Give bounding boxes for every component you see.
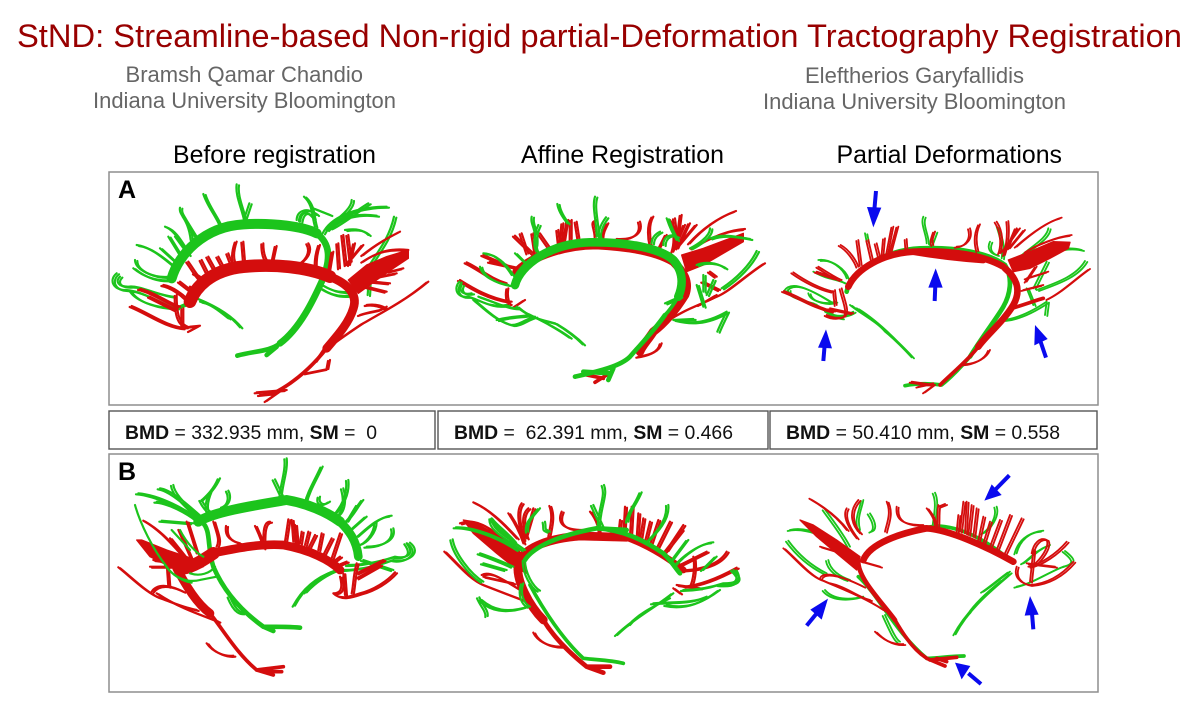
stat box: affine registration [438,411,768,449]
tract: panel B partial deformations [783,493,1075,666]
author: Eleftherios Garyfallidis: Indiana University Bloomington [763,89,1066,114]
tract: panel B before registration [118,458,415,675]
author: Bramsh Qamar Chandio: Bramsh Qamar Chandio [126,62,363,87]
stat box: partial deformations [770,411,1097,449]
blue arrow: panel B right [1025,596,1039,629]
title: StND: Streamline-based Non-rigid partial-Deformation Tractography Registration [17,17,1182,54]
column heading: partial deformations: Partial Deformations [836,142,1062,169]
blue arrow: panel A lower left [818,329,832,361]
column heading: affine registration: Affine Registration [521,142,724,169]
blue arrow: panel A top left [867,191,881,227]
panel A frame [109,172,1098,405]
blue arrow: panel B top right [984,475,1009,501]
panel B frame [109,454,1098,692]
author: Eleftherios Garyfallidis: Eleftherios Garyfallidis [805,63,1024,88]
tract: panel B affine registration [444,485,740,673]
panel B label: B [118,458,136,486]
author: Bramsh Qamar Chandio: Indiana University Bloomington [93,88,396,113]
stat box: before registration: BMD = 332.935 mm, SM = 0 [125,422,377,444]
column heading: before registration: Before registration [173,142,376,169]
tract: panel A affine registration [456,197,765,382]
panel A label: A [118,176,136,204]
blue arrow: panel A centre [928,268,943,301]
stat box: partial deformations: BMD = 50.410 mm, SM = 0.558 [786,422,1060,444]
author: Bramsh Qamar Chandio [93,62,396,113]
blue arrow: panel A lower right [1034,325,1048,358]
tract: panel A before registration [113,184,428,402]
author: Eleftherios Garyfallidis [763,63,1066,114]
stat box: before registration [109,411,435,449]
blue arrow: panel B left [807,599,828,626]
stat box: affine registration: BMD = 62.391 mm, SM = 0.466 [454,422,733,444]
tract: panel A partial deformations [782,217,1090,393]
blue arrow: panel B bottom [955,663,981,684]
